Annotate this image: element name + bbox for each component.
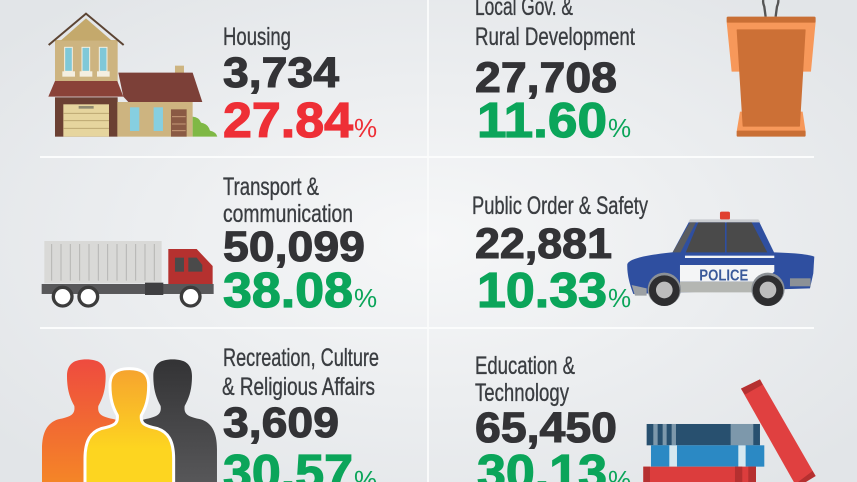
value: 65,450: 65,450 [475, 404, 617, 452]
label: housing: Housing [223, 23, 291, 51]
label: technology: Technology [475, 379, 569, 407]
percent: 27.84: 27.84 % [223, 94, 377, 148]
label: education: Education & [475, 352, 575, 380]
label: religious affairs: & Religious Affairs [222, 373, 375, 401]
icon: podium [727, 0, 816, 137]
panel: housing [48, 14, 377, 148]
panel: recreation [42, 344, 379, 482]
value: 50,099: 50,099 [223, 223, 365, 271]
value: 3,609: 3,609 [223, 399, 339, 447]
panel: transport [42, 173, 377, 318]
percent: 10.33: 10.33 % [477, 264, 631, 318]
label: communication: communication [223, 200, 353, 228]
label: transport: Transport & [223, 173, 319, 201]
panel: public order [472, 192, 814, 318]
icon: police car [627, 212, 814, 306]
label: rural development: Rural Development [475, 23, 635, 51]
percent: 11.60: 11.60 % [477, 94, 631, 148]
icon: people [42, 359, 217, 482]
value: 27,708: 27,708 [475, 54, 617, 102]
percent: 38.08: 38.08 % [223, 264, 377, 318]
icon: books [643, 379, 816, 482]
icon: police car: POLICE [699, 268, 748, 285]
icon: truck [42, 241, 214, 306]
value: 3,734: 3,734 [223, 49, 339, 97]
label: recreation, culture: Recreation, Culture [223, 344, 379, 372]
panel: local government [475, 0, 816, 148]
label: public order and safety: Public Order & Safety [472, 192, 648, 220]
value: 22,881: 22,881 [475, 220, 612, 268]
panel: education [475, 352, 816, 482]
icon: house [48, 14, 217, 137]
